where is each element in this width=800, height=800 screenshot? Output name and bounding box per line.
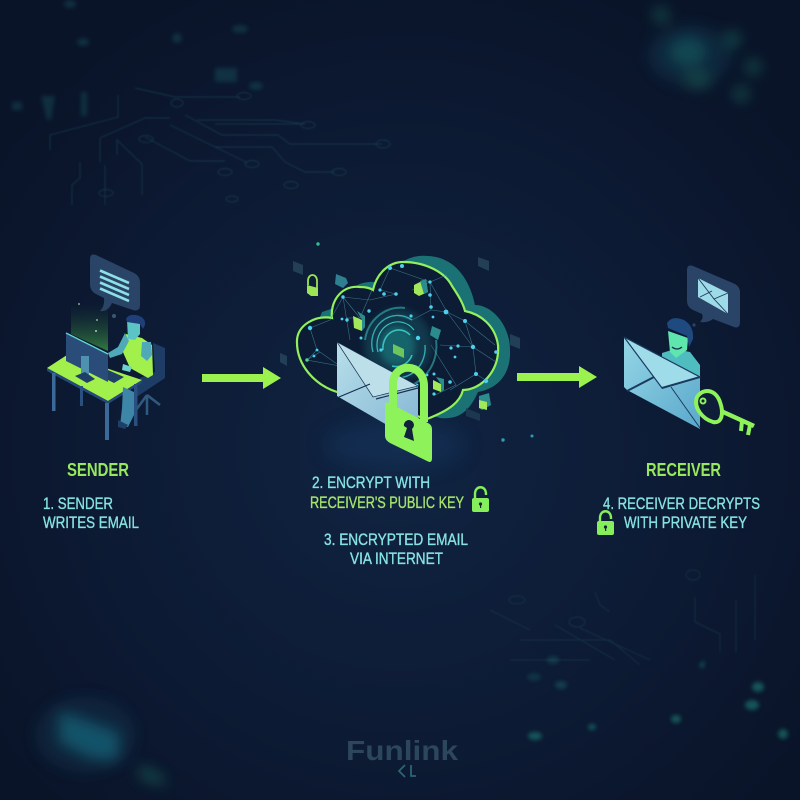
- padlock: [385, 368, 432, 462]
- person: [662, 318, 700, 378]
- floor glow: [325, 420, 465, 470]
- receiver illustration: [624, 266, 754, 435]
- logo: [346, 735, 458, 777]
- sender illustration: [47, 254, 165, 440]
- cloud extrusion: [310, 256, 510, 418]
- glow: bottom right dots: [527, 656, 788, 740]
- small green lock in vortex: [393, 344, 404, 358]
- label: receiver heading: RECEIVER: [646, 460, 721, 480]
- circuit pattern: bottom right: [490, 570, 755, 665]
- vortex: [362, 308, 436, 388]
- label: sender heading: SENDER: [67, 460, 129, 480]
- text: step 1: [43, 494, 139, 532]
- screen glow: [71, 303, 116, 351]
- text: step 1: WRITES EMAIL: [43, 513, 139, 532]
- glow: top left dots: [12, 0, 263, 120]
- text: step 2: 2. ENCRYPT WITH: [312, 473, 430, 492]
- floating lock: [307, 275, 318, 296]
- icon: open lock, step 2: [472, 487, 489, 512]
- text: step 3: VIA INTERNET: [350, 549, 443, 568]
- text: step 3: [324, 530, 468, 568]
- arrow: cloud to receiver: [517, 366, 597, 388]
- icon: open lock, step 4: [597, 511, 614, 535]
- network lines: [307, 268, 496, 395]
- text: step 4: 4. RECEIVER DECRYPTS: [603, 494, 760, 513]
- speech bubble: message: [90, 254, 140, 311]
- monitor: [66, 333, 124, 383]
- envelope: [337, 342, 418, 430]
- text: step 2: [310, 473, 464, 512]
- network nodes: [305, 264, 498, 396]
- speech bubble: envelope: [687, 266, 740, 327]
- cloud body: [297, 262, 498, 419]
- cubes in cloud: [353, 279, 444, 392]
- text: step 3: 3. ENCRYPTED EMAIL: [324, 530, 468, 549]
- floating particles: [280, 242, 534, 442]
- logo: Funlink: [346, 735, 458, 766]
- glow: bottom left blurred block: [35, 697, 165, 785]
- arrow: sender to cloud: [202, 367, 281, 389]
- key: [696, 391, 754, 435]
- circuit pattern: top left: [50, 88, 390, 205]
- text: step 4: [603, 494, 760, 532]
- text: step 2: RECEIVER'S PUBLIC KEY: [310, 493, 464, 512]
- chair: [135, 343, 165, 415]
- envelope: [624, 337, 700, 429]
- text: step 1: 1. SENDER: [43, 494, 113, 513]
- text: step 4: WITH PRIVATE KEY: [624, 513, 747, 532]
- person: [108, 315, 153, 429]
- desk: [47, 355, 142, 440]
- encryption cloud illustration: [280, 242, 534, 470]
- glow: top right blurred network: [648, 8, 760, 101]
